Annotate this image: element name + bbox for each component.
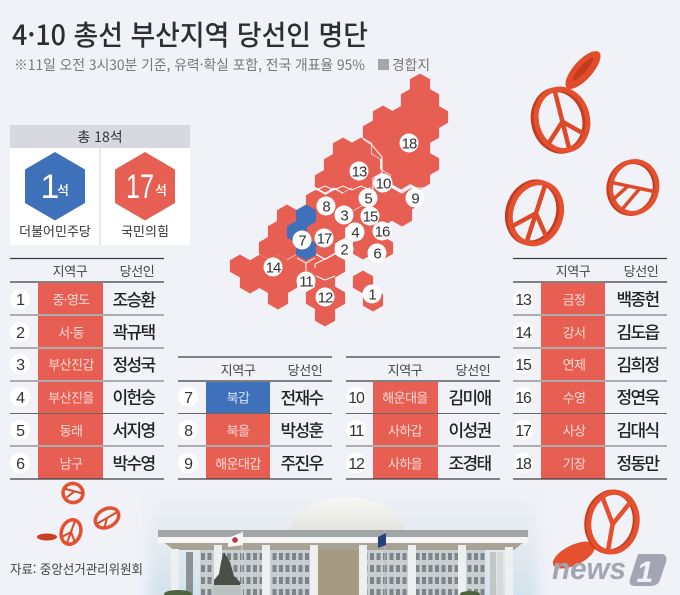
panel: seat totals: 국민의힘 xyxy=(121,221,169,240)
map number badges xyxy=(264,134,424,306)
table: districts 1-6: 정성국 xyxy=(112,351,156,376)
map number badges: 5 xyxy=(364,190,372,208)
table: districts 7-9: 북을 xyxy=(227,420,250,440)
map number badges: 2 xyxy=(340,242,348,258)
table: districts 10-12: 당선인 xyxy=(456,360,490,379)
table: districts 13-18: 지역구 xyxy=(556,261,591,280)
table: districts 1-6: 조승환 xyxy=(112,286,157,311)
map number badges: 16 xyxy=(375,224,390,240)
panel: seat totals xyxy=(10,125,190,245)
map number badges: 3 xyxy=(340,208,348,224)
table: districts 13-18: 14 xyxy=(515,325,532,342)
flag: National Assembly xyxy=(378,531,386,595)
table: districts 7-9: 지역구 xyxy=(221,360,256,379)
map number badges: 10 xyxy=(376,176,391,192)
map number badges: 9 xyxy=(411,190,419,208)
table: districts 13-18: 18 xyxy=(515,456,532,473)
table: districts 10-12: 이성권 xyxy=(448,416,492,442)
table: districts 1-6: 지역구 xyxy=(53,261,88,280)
title: 4·10 총선 부산지역 당선인 명단 xyxy=(12,14,368,54)
table: districts 1-6: 곽규택 xyxy=(112,318,155,344)
table: districts 13-18: 17 xyxy=(515,423,532,440)
table: districts 7-9: 해운대갑 xyxy=(215,454,261,472)
map number badges: 4 xyxy=(351,224,359,242)
table: districts 1-6: 이헌승 xyxy=(112,384,156,408)
table: districts 10-12 xyxy=(346,357,500,479)
watermark: news1: news xyxy=(552,551,626,586)
map number badges: 18 xyxy=(402,136,417,152)
table: districts 1-6: 동래 xyxy=(60,420,82,440)
table: districts 10-12: 사하갑 xyxy=(388,420,423,440)
table: districts 7-9: 당선인 xyxy=(288,360,322,379)
table: districts 13-18: 정동만 xyxy=(616,450,661,474)
icon: democratic party seats: 석 xyxy=(57,180,69,199)
map number badges: 7 xyxy=(298,232,306,250)
table: districts 13-18: 금정 xyxy=(563,290,585,308)
hexagon map of Busan districts xyxy=(231,74,447,326)
table: districts 7-9: 전재수 xyxy=(280,384,324,409)
table: districts 7-9: 7 xyxy=(184,390,193,407)
map number badges: 17 xyxy=(317,230,332,248)
table: districts 1-6: 부산진갑 xyxy=(48,354,94,374)
illustration: National Assembly building xyxy=(148,492,538,595)
table: districts 1-6: 부산진을 xyxy=(48,388,94,406)
table: districts 13-18: 16 xyxy=(515,390,532,407)
table: districts 13-18: 당선인 xyxy=(624,261,658,280)
table: districts 7-9 xyxy=(178,357,332,479)
table: districts 7-9: 8 xyxy=(184,423,193,440)
subtitle note: ※11일 오전 3시30분 기준, 유력·확실 포함, 전국 개표율 95% xyxy=(14,55,365,75)
map number badges: 6 xyxy=(373,246,381,262)
icon: democratic party seats xyxy=(25,152,85,220)
table: districts 13-18: 백종헌 xyxy=(616,286,659,310)
watermark: news1 xyxy=(552,551,666,589)
table: districts 1-6: 2 xyxy=(16,325,25,342)
panel: seat totals: 총 18석 xyxy=(77,127,123,147)
map number badges: 1 xyxy=(368,286,376,304)
table: districts 7-9: 9 xyxy=(184,456,193,473)
map number badges: 14 xyxy=(266,260,281,276)
table: districts 10-12: 조경태 xyxy=(448,450,492,474)
table: districts 13-18: 김도읍 xyxy=(616,318,660,344)
icon: democratic party seats: 1 xyxy=(41,168,59,206)
table: districts 7-9: 북갑 xyxy=(227,388,250,406)
map number badges: 8 xyxy=(322,198,330,216)
icon: people power party seats xyxy=(115,152,175,220)
table: districts 10-12: 사하을 xyxy=(388,454,423,472)
legend: contested: 경합지 xyxy=(392,55,430,75)
table: districts 10-12: 12 xyxy=(348,456,365,473)
table: districts 13-18: 김대식 xyxy=(616,416,659,442)
table: districts 13-18: 연제 xyxy=(563,354,585,374)
table: districts 1-6: 1 xyxy=(16,292,25,309)
table: districts 10-12: 10 xyxy=(348,390,365,407)
table: districts 1-6: 중·영도 xyxy=(52,290,90,308)
table: districts 13-18: 정연욱 xyxy=(616,384,660,408)
table: districts 10-12: 11 xyxy=(349,423,364,440)
icon: ballot stamp ring top xyxy=(527,46,606,157)
table: districts 7-9: 박성훈 xyxy=(280,416,324,442)
table: districts 10-12: 해운대을 xyxy=(382,388,428,406)
map number badges: 11 xyxy=(299,274,313,290)
icon: people power party seats: 17 xyxy=(126,168,154,206)
table: districts 13-18: 수영 xyxy=(563,388,585,406)
table: districts 1-6: 서·동 xyxy=(58,322,85,342)
table: districts 10-12: 지역구 xyxy=(388,360,423,379)
table: districts 13-18: 기장 xyxy=(563,454,586,472)
table: districts 13-18: 강서 xyxy=(563,322,585,342)
icons: small ballot stamp rings xyxy=(37,481,122,547)
table: districts 1-6: 3 xyxy=(16,357,25,374)
map number badges: 15 xyxy=(363,208,378,226)
table: districts 10-12: 김미애 xyxy=(448,384,492,409)
table: districts 1-6 xyxy=(10,258,164,479)
table: districts 1-6: 남구 xyxy=(60,454,83,472)
table: districts 1-6: 박수영 xyxy=(112,450,155,474)
icon: people power party seats: 석 xyxy=(155,180,167,199)
table: districts 13-18: 사상 xyxy=(563,420,586,440)
table: districts 1-6: 6 xyxy=(16,456,25,473)
table: districts 13-18: 15 xyxy=(515,357,532,374)
table: districts 13-18: 김희정 xyxy=(616,351,659,376)
table: districts 1-6: 4 xyxy=(16,390,25,407)
icon: ballot stamp ring bottom right xyxy=(549,488,642,574)
map number badges: 13 xyxy=(352,164,367,180)
sculpture xyxy=(214,552,240,585)
flag: South Korea xyxy=(228,531,243,595)
table: districts 7-9: 주진우 xyxy=(280,450,324,474)
table: districts 1-6: 당선인 xyxy=(120,261,154,280)
table: districts 1-6: 5 xyxy=(16,423,25,440)
icon: ballot stamp ring left xyxy=(500,175,569,251)
map number badges: 12 xyxy=(318,290,333,306)
panel: seat totals: 더불어민주당 xyxy=(19,221,91,240)
source credit: 자료: 중앙선거관리위원회 xyxy=(10,559,143,578)
table: districts 13-18: 13 xyxy=(515,292,532,309)
watermark: news1: 1 xyxy=(637,556,653,589)
icon: ballot stamp ring right xyxy=(604,157,662,218)
table: districts 13-18 xyxy=(513,258,667,479)
table: districts 1-6: 서지영 xyxy=(112,416,155,442)
